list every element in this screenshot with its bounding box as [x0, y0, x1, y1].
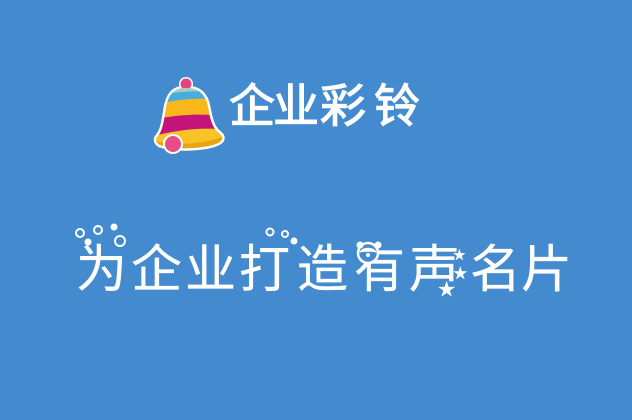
decorative bubbles, panda and stars: ★	[454, 266, 467, 282]
logo wordmark: 企	[229, 80, 275, 132]
icon: colourful bell	[154, 77, 225, 154]
slogan	[76, 241, 572, 298]
slogan: 有	[354, 241, 405, 298]
slogan: 声	[409, 241, 460, 298]
slogan: 企	[131, 241, 182, 298]
slogan: 业	[185, 241, 236, 298]
slogan: 片	[521, 241, 572, 298]
logo wordmark: 业	[273, 80, 319, 132]
slogan: 造	[297, 241, 348, 298]
decorative bubbles, panda and stars: ★	[439, 280, 454, 300]
decorative bubbles, panda and stars: ★	[454, 248, 465, 262]
slogan: 名	[470, 241, 521, 298]
logo wordmark: 铃	[374, 80, 420, 132]
logo wordmark	[229, 80, 420, 132]
logo wordmark: 彩	[320, 80, 366, 132]
slogan: 为	[76, 241, 127, 298]
slogan: 打	[239, 241, 290, 298]
